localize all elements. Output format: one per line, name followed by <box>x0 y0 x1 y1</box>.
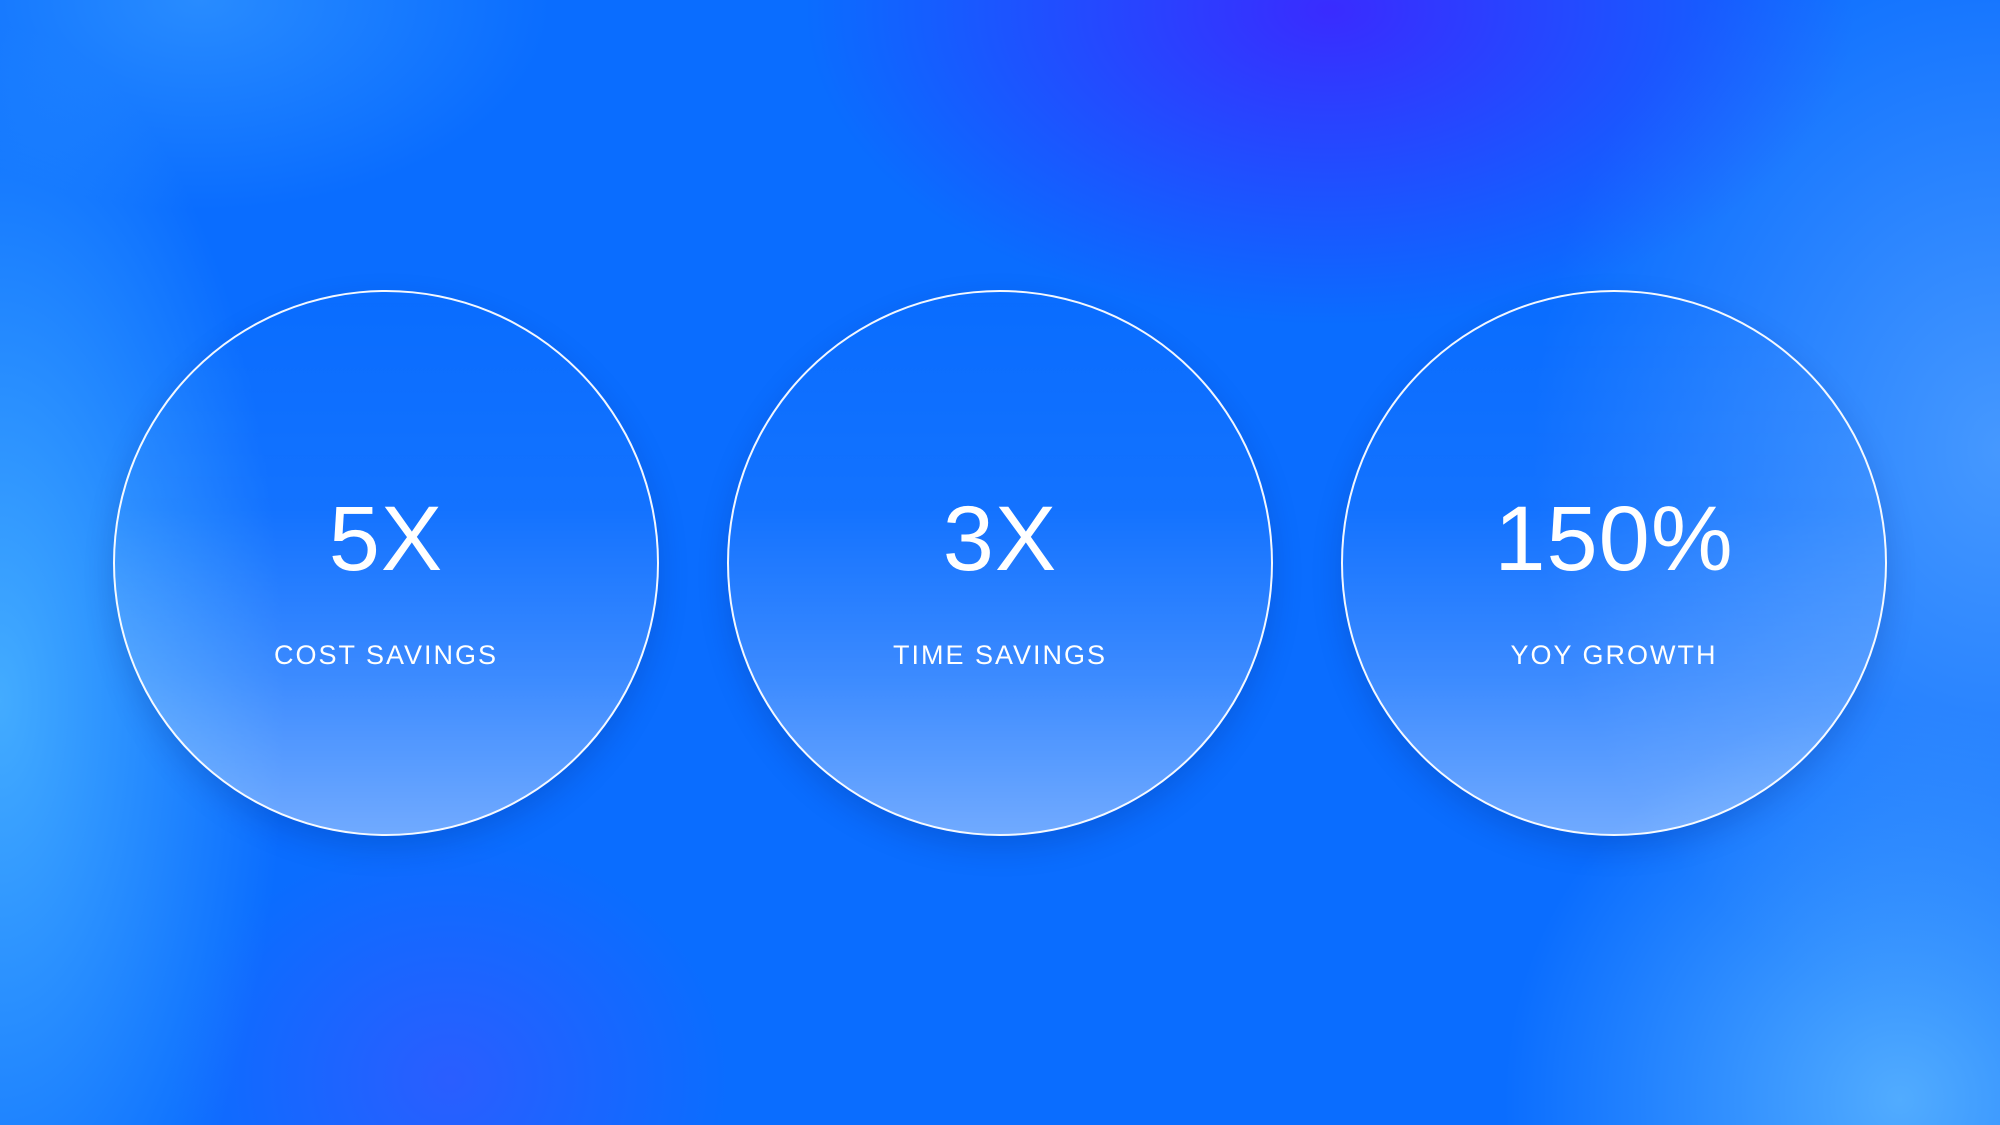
panel: time savings circle <box>727 290 1273 836</box>
label: yoy growth: YOY GROWTH <box>1510 640 1718 670</box>
label: time savings: TIME SAVINGS <box>893 640 1107 670</box>
metric: 5X: 5X <box>329 488 443 590</box>
label: cost savings: COST SAVINGS <box>274 640 498 670</box>
panel: cost savings circle <box>113 290 659 836</box>
panel: yoy growth circle <box>1341 290 1887 836</box>
metric: 150%: 150% <box>1494 488 1734 590</box>
metric: 3X: 3X <box>943 488 1057 590</box>
